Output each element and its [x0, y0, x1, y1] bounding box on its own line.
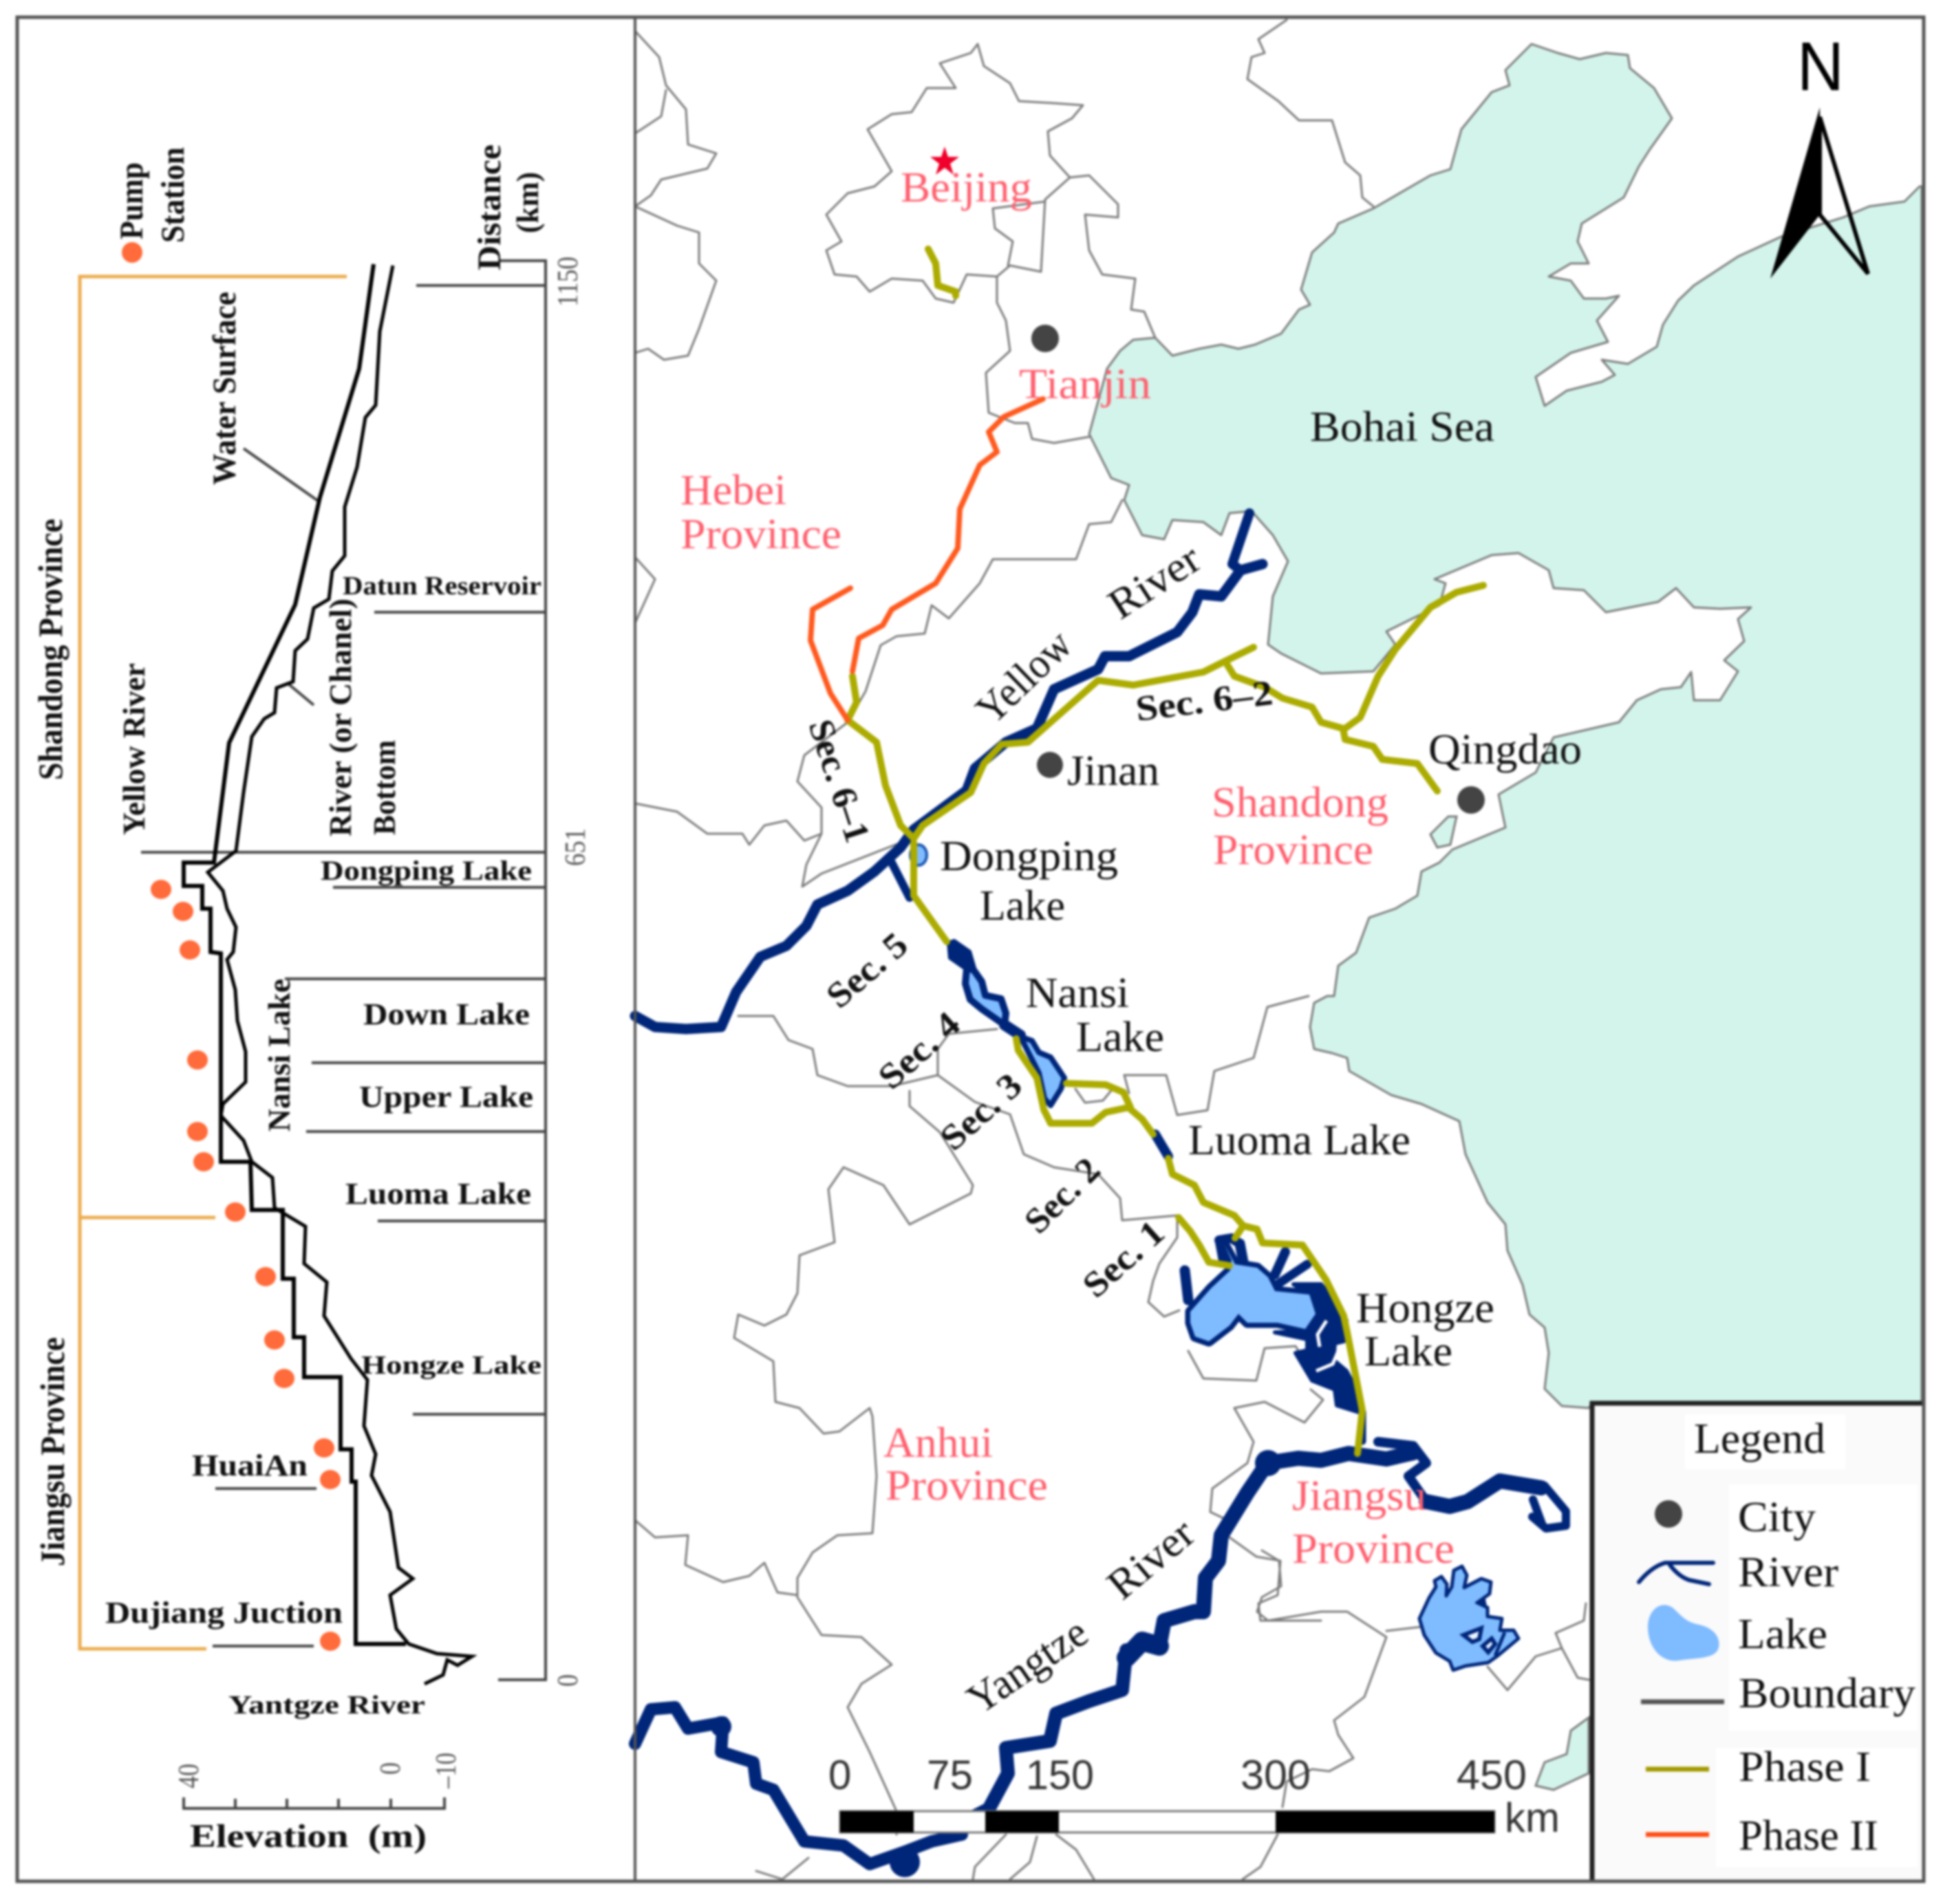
scale bar [828, 1752, 1560, 1841]
province and city labels: Tianjin [1019, 361, 1151, 408]
rotated labels: 0 [375, 1762, 407, 1775]
province and city labels: Jiangsu [1292, 1473, 1426, 1519]
scale bar: 0 [828, 1752, 851, 1798]
river: Yellow River [635, 513, 1263, 1156]
province and city labels: Beijing [901, 164, 1032, 211]
section labels: Sec. 6–1 [801, 715, 877, 847]
province and city labels: Qingdao [1428, 726, 1582, 773]
pump stations [122, 242, 341, 1651]
distance axis and lines [141, 261, 546, 1680]
river name labels: River [1098, 1509, 1204, 1609]
horizontal labels: Dongping Lake [321, 855, 532, 886]
rotated labels: (km) [510, 172, 545, 233]
lake: Taihu [1419, 1566, 1518, 1670]
rotated labels: Jiangsu Province [33, 1337, 72, 1566]
scale bar: 75 [927, 1752, 973, 1798]
legend: Lake [1738, 1611, 1827, 1658]
horizontal labels: Datun Reservoir [343, 572, 541, 601]
elevation axis: Elevation (m) [190, 1818, 427, 1854]
north arrow [1770, 28, 1868, 279]
icon: Beijing capital star [930, 147, 959, 175]
province and city labels: Province [1213, 827, 1373, 874]
province boundaries [635, 20, 1589, 1879]
section labels: Sec. 3 [933, 1065, 1030, 1158]
rotated labels: 651 [560, 828, 592, 866]
province and city labels: Jinan [1067, 748, 1159, 794]
scale bar: 450 [1457, 1752, 1527, 1798]
province and city labels [680, 164, 1582, 1572]
province and city labels: Province [680, 511, 841, 558]
river: Yangtze River [635, 1442, 1566, 1877]
province and city labels: Lake [1076, 1014, 1164, 1061]
province and city labels: Anhui [883, 1420, 993, 1467]
province and city labels: Dongping [940, 833, 1118, 880]
scale bar: 300 [1241, 1752, 1311, 1798]
route: Phase II canal [811, 399, 1043, 720]
rotated labels: Bottom [367, 740, 402, 835]
river name labels [958, 535, 1210, 1724]
lake: Hongze Lake [1185, 1238, 1362, 1441]
rotated labels: Yellow River [116, 663, 151, 835]
river name labels: Yellow [967, 620, 1082, 733]
rotated labels: 40 [173, 1764, 205, 1788]
section labels: Sec. 1 [1075, 1213, 1172, 1306]
province and city labels: Province [1292, 1526, 1454, 1572]
province and city labels: Lake [980, 883, 1065, 929]
province and city labels: Bohai Sea [1310, 404, 1494, 451]
province and city labels: Hongze [1356, 1285, 1494, 1332]
north arrow: N [1797, 28, 1844, 105]
route: Phase I canal [848, 249, 1483, 1453]
province and city labels: Hebei [680, 467, 786, 514]
horizontal labels: Upper Lake [359, 1080, 533, 1114]
rotated labels: River (or Chanel) [323, 598, 358, 836]
rotated labels: Nansi Lake [261, 979, 297, 1132]
horizontal labels: Luoma Lake [345, 1177, 531, 1211]
horizontal labels: Yantgze River [228, 1691, 425, 1720]
rotated labels: Water Surface [206, 292, 243, 485]
lake: Nansi Lake [948, 940, 1064, 1105]
sea [1089, 44, 1922, 1790]
scale bar: 150 [1026, 1752, 1094, 1798]
lake: Dongping Lake [910, 845, 927, 865]
rotated labels: Shandong Province [31, 519, 69, 780]
province and city labels: Nansi [1026, 970, 1129, 1017]
horizontal labels: Dujiang Juction [105, 1596, 343, 1630]
legend: City [1738, 1494, 1816, 1541]
rotated labels: Pump [114, 162, 150, 239]
river name labels: River [1100, 535, 1210, 629]
horizontal labels: Hongze Lake [361, 1351, 541, 1380]
province and city labels: Shandong [1212, 779, 1388, 826]
province and city labels: Province [885, 1462, 1048, 1509]
section labels: Sec. 2 [1017, 1150, 1108, 1241]
section labels: Sec. 4 [871, 1004, 968, 1097]
panel: map [635, 20, 1922, 1881]
channel bottom line [208, 266, 472, 1684]
legend [1592, 1403, 1922, 1881]
panel: elevation profile [31, 144, 592, 1854]
legend: Phase I [1739, 1744, 1871, 1791]
rotated labels: –10 [431, 1753, 462, 1789]
horizontal labels: Down Lake [363, 997, 530, 1031]
province and city labels: Luoma Lake [1188, 1117, 1410, 1164]
city markers [1031, 325, 1485, 814]
rotated labels: 1150 [552, 257, 584, 307]
rotated labels [31, 144, 592, 1789]
rotated labels: 0 [552, 1674, 584, 1687]
scale bar: km [1505, 1795, 1560, 1841]
horizontal labels [105, 572, 541, 1720]
province and city labels: Lake [1364, 1328, 1452, 1375]
water surface line [184, 264, 406, 1644]
rotated labels: Station [155, 147, 191, 243]
horizontal labels: HuaiAn [192, 1449, 308, 1482]
rotated labels: Distance [471, 144, 508, 270]
section labels: Sec. 5 [819, 925, 916, 1016]
elevation axis [184, 1797, 444, 1854]
province brackets [80, 277, 347, 1649]
legend: Legend [1694, 1416, 1825, 1462]
legend: River [1738, 1549, 1838, 1596]
section labels [801, 673, 1275, 1306]
legend: Boundary [1739, 1670, 1915, 1717]
legend: Phase II [1739, 1813, 1878, 1859]
river name labels: Yangtze [958, 1609, 1097, 1724]
section labels: Sec. 6–2 [1134, 673, 1275, 729]
